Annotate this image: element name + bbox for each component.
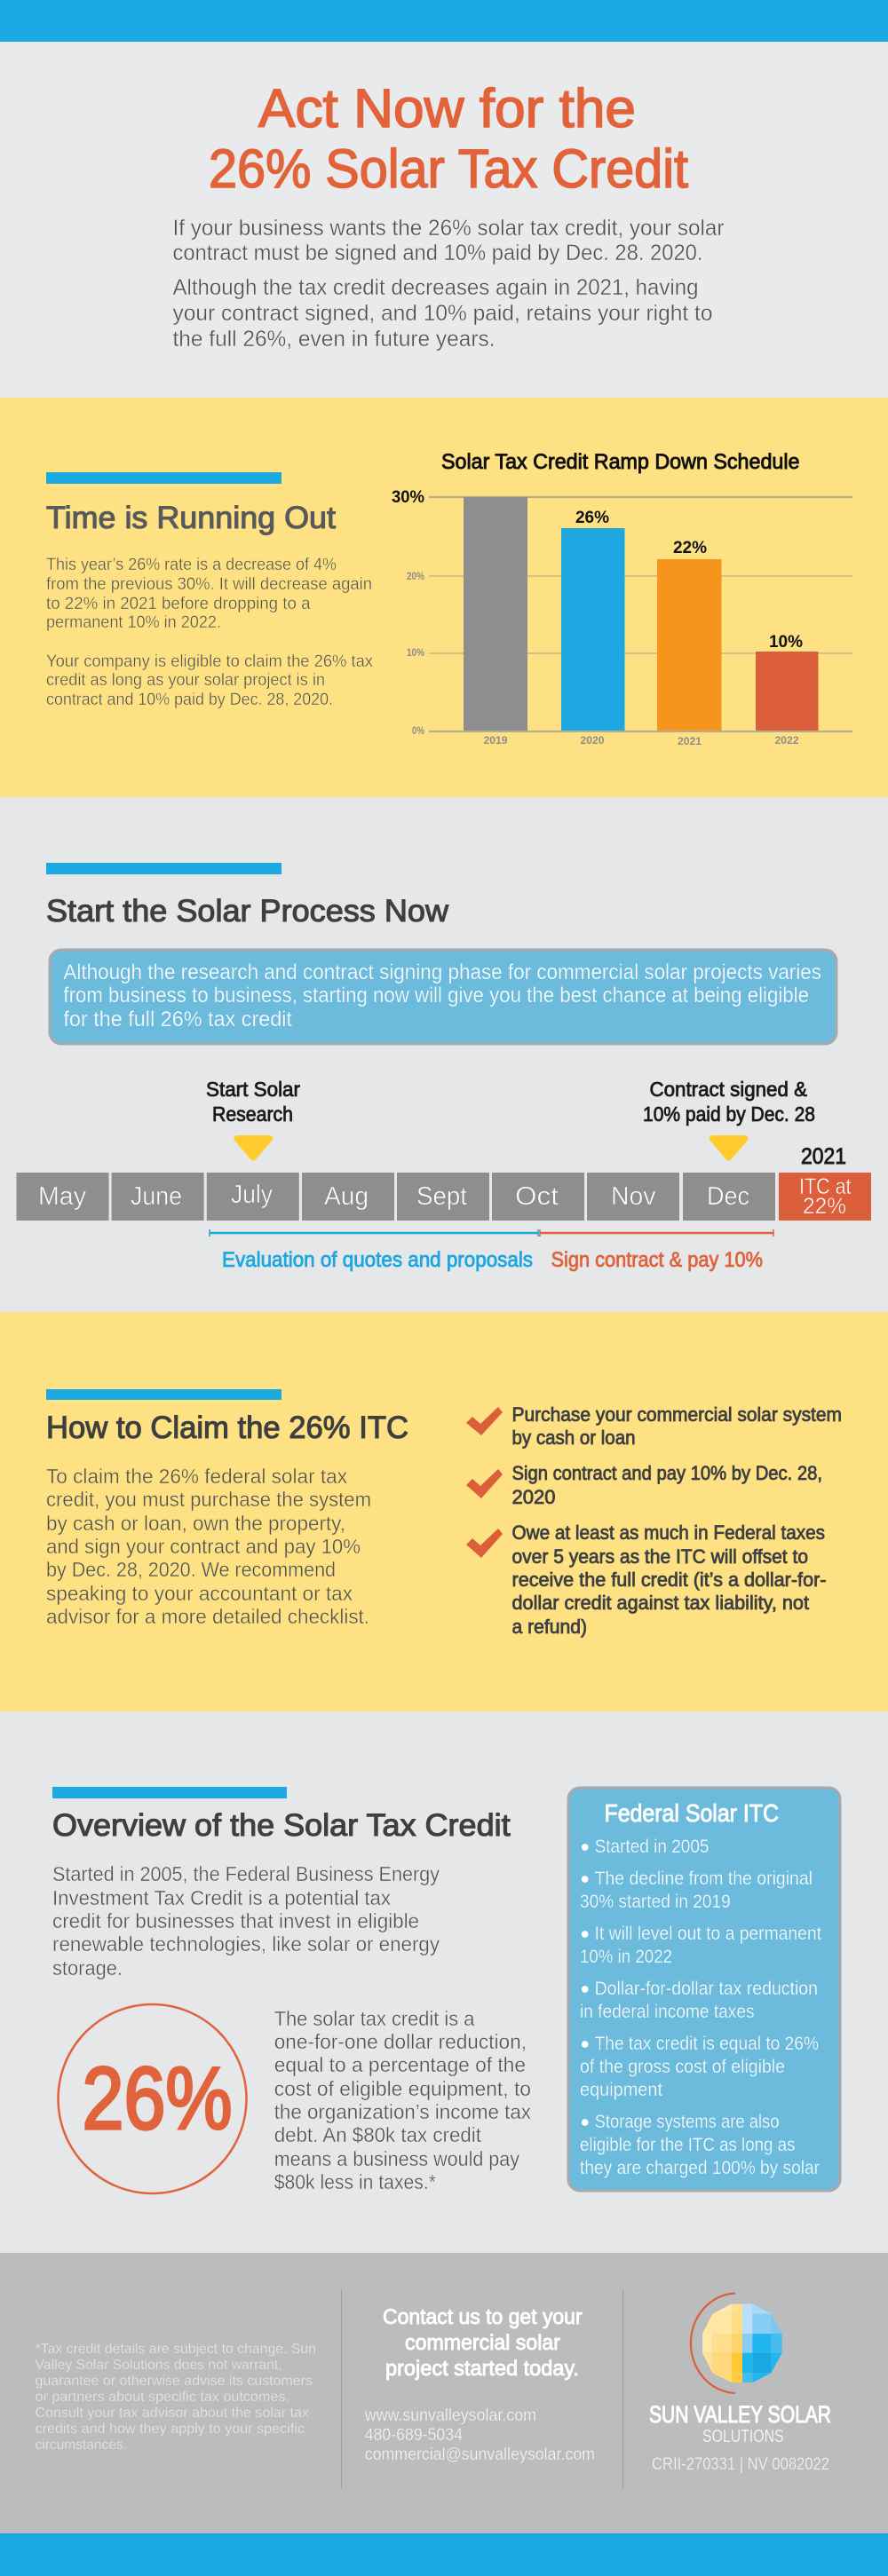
item 3: receive the full credit (it’s a dollar-for- [511, 1569, 826, 1591]
accent bar [46, 1389, 281, 1400]
item 2: Sign contract and pay 10% by Dec. 28, [511, 1462, 822, 1484]
body text: Investment Tax Credit is a potential tax [52, 1886, 391, 1909]
panel: time is running out [0, 398, 888, 797]
icon: check 2 [466, 1469, 503, 1498]
bullet list: 30% started in 2019 [580, 1892, 731, 1912]
bracket: sign contract [540, 1229, 773, 1237]
explanation text [274, 2007, 531, 2193]
bullet list: Started in 2005 [595, 1837, 709, 1857]
contact details: www.sunvalleysolar.com [364, 2406, 536, 2425]
body text: contract and 10% paid by Dec. 28, 2020. [46, 691, 333, 709]
contact heading: project started today. [385, 2357, 579, 2381]
month bar: Nov [611, 1182, 656, 1211]
milestone label: contract signed: 10% paid by Dec. 28 [643, 1102, 815, 1126]
item 3: a refund) [511, 1616, 587, 1638]
explanation text: The solar tax credit is a [274, 2007, 475, 2030]
chart title: Solar Tax Credit Ramp Down Schedule [441, 450, 799, 474]
value labels: 22% [673, 539, 707, 557]
contact details: 480-689-5034 [365, 2426, 463, 2445]
month bar: Dec [707, 1182, 749, 1211]
intro text: the full 26%, even in future years. [172, 327, 496, 352]
body text: by Dec. 28, 2020. We recommend [46, 1558, 336, 1581]
body text: credit as long as your solar project is in [46, 671, 325, 690]
milestone label: contract signed [643, 1078, 815, 1126]
axis labels [407, 570, 799, 747]
body text: This year’s 26% rate is a decrease of 4% [46, 556, 337, 574]
contact heading: Contact us to get your [383, 2305, 583, 2329]
month bar: Oct [515, 1182, 559, 1211]
item 3 [511, 1521, 826, 1638]
item 3: dollar credit against tax liability, not [511, 1592, 809, 1614]
contact details [364, 2406, 595, 2464]
title: 26% Solar Tax Credit [209, 138, 688, 199]
heading: Time is Running Out [46, 501, 336, 535]
bullet list: Dollar-for-dollar tax reduction [595, 1979, 818, 1999]
panel: how to claim [0, 1312, 888, 1711]
icon: check 3 [466, 1529, 503, 1558]
item 3: over 5 years as the ITC will offset to [511, 1545, 808, 1568]
bullet list: Storage systems are also [595, 2112, 780, 2132]
month bar: Sept [416, 1182, 467, 1211]
month bar: Aug [324, 1182, 369, 1211]
bullet list: equipment [580, 2080, 662, 2100]
item 1: by cash or loan [511, 1426, 636, 1449]
body text: from the previous 30%. It will decrease again [46, 575, 372, 594]
footnote: circumstances. [36, 2438, 127, 2453]
icon: marker July [234, 1135, 273, 1161]
callout: from business to business, starting now will give you the best chance at being eligible [63, 984, 809, 1007]
timeline [16, 1078, 871, 1272]
month bar: June [131, 1182, 182, 1211]
axis labels: 10% [407, 646, 424, 659]
body text: by cash or loan, own the property, [46, 1512, 345, 1535]
axis labels: 2021 [678, 735, 702, 747]
panel: start the solar process [0, 797, 888, 1312]
accent bar [46, 472, 281, 484]
bullet list: The decline from the original [595, 1869, 813, 1889]
body text: Your company is eligible to claim the 26% tax [46, 652, 373, 671]
explanation text: cost of eligible equipment, to [274, 2077, 531, 2100]
milestone label: contract signed: Contract signed & [650, 1078, 807, 1101]
intro text: If your business wants the 26% solar tax credit, your solar [172, 216, 725, 241]
license numbers: CRII-270331 | NV 0082022 [652, 2455, 829, 2474]
panel: footer [0, 2253, 888, 2576]
body text [46, 556, 373, 709]
body text: to 22% in 2021 before dropping to a [46, 595, 311, 613]
bar 2020 [561, 528, 625, 731]
month bar: ITC at [799, 1174, 852, 1199]
footnote: guarantee or otherwise advise its customers [36, 2374, 313, 2389]
title: Act Now for the [258, 78, 636, 138]
title [209, 78, 688, 199]
logo [649, 2294, 831, 2474]
accent bar [52, 1787, 287, 1798]
month bar [16, 1173, 871, 1221]
body text: renewable technologies, like solar or energy [52, 1932, 440, 1956]
company name: SUN VALLEY SOLAR [649, 2401, 831, 2428]
body text [52, 1862, 440, 1979]
callout: for the full 26% tax credit [63, 1007, 292, 1031]
bottom blue band [0, 2533, 888, 2576]
top blue band [0, 0, 888, 42]
value labels [392, 488, 803, 652]
logo faceted globe [702, 2304, 782, 2382]
body text: advisor for a more detailed checklist. [46, 1605, 369, 1628]
value labels: 30% [392, 488, 424, 507]
stat circle: 26%: 26% [82, 2049, 233, 2147]
intro text [172, 216, 725, 352]
milestone label: start solar research: Research [212, 1102, 293, 1126]
heading: Overview of the Solar Tax Credit [52, 1808, 511, 1843]
contact heading: commercial solar [405, 2331, 560, 2355]
panel: overview [0, 1711, 888, 2253]
logo arc [691, 2294, 735, 2393]
axis labels: 2022 [774, 734, 799, 747]
contact details: commercial@sunvalleysolar.com [365, 2446, 595, 2464]
heading: Start the Solar Process Now [46, 894, 449, 928]
bullet list [580, 1837, 821, 2178]
bar 2022 [756, 652, 819, 731]
explanation text: the organization’s income tax [274, 2100, 531, 2123]
bullet list: they are charged 100% by solar [580, 2158, 820, 2178]
checklist [466, 1403, 842, 1638]
axis labels: 2019 [483, 734, 508, 747]
intro text: Although the tax credit decreases again in 2021, having [172, 275, 698, 300]
footnote: credits and how they apply to your specific [36, 2422, 305, 2437]
panel: hero [0, 0, 888, 398]
bullet list: in federal income taxes [580, 2002, 755, 2022]
contact heading [383, 2305, 583, 2381]
item 2 [511, 1462, 822, 1508]
bar chart: ramp down schedule [392, 450, 852, 747]
footnote: or partners about specific tax outcomes. [36, 2390, 289, 2405]
body text: credit, you must purchase the system [46, 1488, 371, 1511]
item 2: 2020 [511, 1486, 556, 1508]
bracket: evaluation [210, 1229, 538, 1237]
month bar: July [231, 1181, 273, 1209]
company subtitle: SOLUTIONS [702, 2427, 784, 2446]
month bar: May [38, 1182, 86, 1211]
callout: Although the research and contract signing phase for commercial solar projects varies [63, 960, 821, 984]
explanation text: one-for-one dollar reduction, [274, 2030, 527, 2053]
footnote: Consult your tax advisor about the solar tax [36, 2406, 309, 2421]
explanation text: $80k less in taxes.* [274, 2170, 436, 2193]
year label: 2021 [801, 1144, 846, 1169]
icon: marker December [710, 1135, 749, 1161]
month bar: 22% [803, 1194, 846, 1219]
item 3: Owe at least as much in Federal taxes [511, 1521, 825, 1544]
item 1 [511, 1403, 842, 1449]
icon: check 1 [466, 1407, 503, 1435]
bar 2021 [657, 559, 721, 731]
body text: storage. [52, 1956, 123, 1979]
panel heading: Federal Solar ITC [604, 1799, 779, 1827]
intro text: your contract signed, and 10% paid, retains your right to [172, 301, 712, 326]
explanation text: means a business would pay [274, 2147, 519, 2170]
panel: federal solar ITC [568, 1788, 840, 2191]
axis labels: 20% [407, 570, 424, 582]
body text [46, 1465, 371, 1628]
label: sign contract: Sign contract & pay 10% [551, 1248, 763, 1272]
body text: To claim the 26% federal solar tax [46, 1465, 347, 1488]
bullet list: The tax credit is equal to 26% [595, 2034, 819, 2054]
bullet list: It will level out to a permanent [595, 1924, 821, 1944]
axis labels: 0% [412, 724, 424, 737]
milestone label: start solar research: Start Solar [206, 1078, 300, 1101]
intro text: contract must be signed and 10% paid by Dec. 28. 2020. [172, 241, 703, 265]
footnote: *Tax credit details are subject to change. Sun [36, 2342, 316, 2357]
explanation text: equal to a percentage of the [274, 2053, 526, 2076]
body text: credit for businesses that invest in eligible [52, 1909, 419, 1932]
accent bar [46, 863, 281, 874]
bullet list: of the gross cost of eligible [580, 2057, 785, 2077]
stat circle: 26% [59, 2004, 247, 2193]
item 1: Purchase your commercial solar system [511, 1403, 842, 1426]
axis labels: 2020 [581, 734, 605, 747]
value labels: 26% [575, 509, 609, 527]
callout [50, 950, 836, 1044]
footnote: Valley Solar Solutions does not warrant, [36, 2358, 282, 2373]
body text: permanent 10% in 2022. [46, 613, 221, 632]
body text: Started in 2005, the Federal Business Energy [52, 1862, 440, 1885]
bullet list: eligible for the ITC as long as [580, 2135, 795, 2155]
body text: and sign your contract and pay 10% [46, 1535, 361, 1558]
heading: How to Claim the 26% ITC [46, 1410, 408, 1445]
body text: speaking to your accountant or tax [46, 1582, 353, 1605]
label: evaluation: Evaluation of quotes and proposals [222, 1248, 533, 1272]
bar 2019 [464, 497, 527, 731]
value labels: 10% [769, 633, 803, 652]
milestone label: start solar research [206, 1078, 300, 1126]
explanation text: debt. An $80k tax credit [274, 2123, 482, 2146]
footnote [36, 2342, 316, 2453]
bullet list: 10% in 2022 [580, 1947, 672, 1967]
